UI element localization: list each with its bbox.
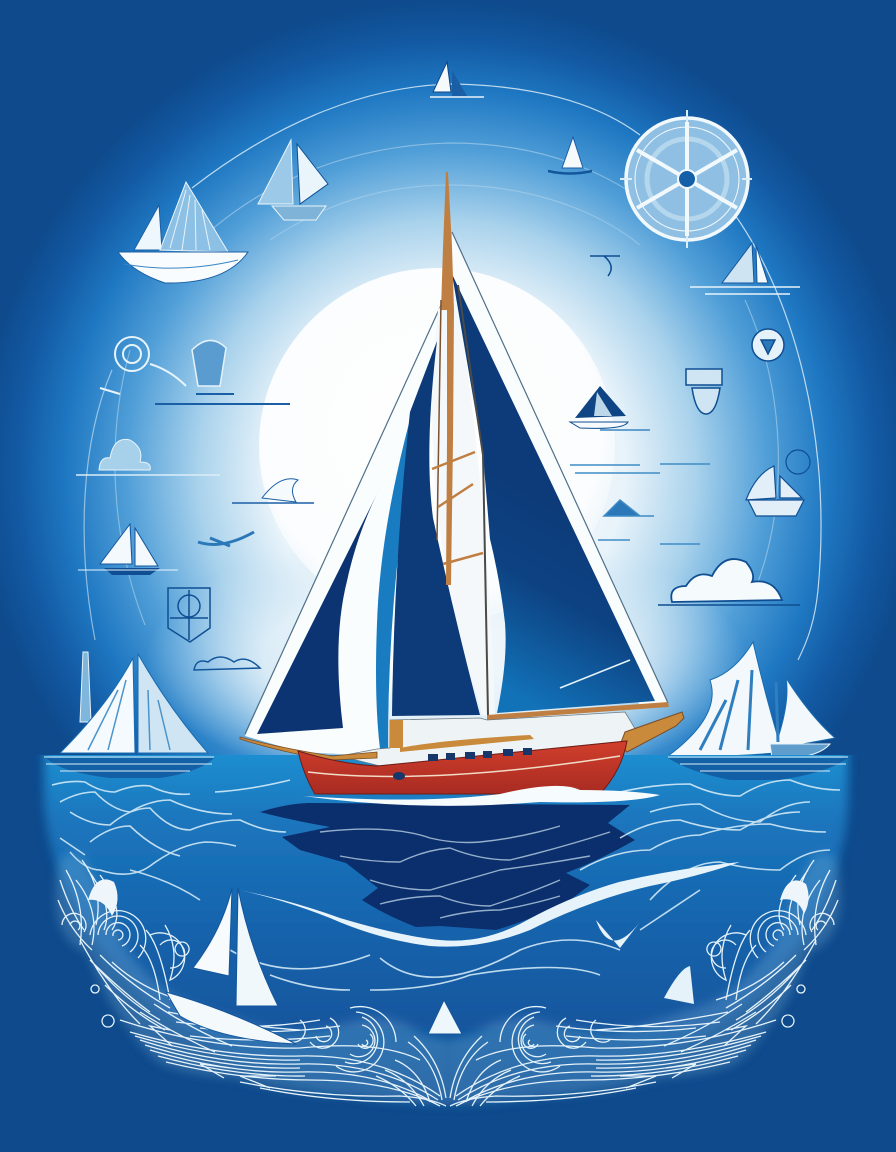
sail highlight bbox=[560, 660, 630, 688]
sea bbox=[38, 755, 854, 1076]
right wave strokes bbox=[570, 464, 710, 544]
small sailboat: left bbox=[78, 524, 178, 575]
small boat: right bbox=[690, 243, 800, 294]
shark fin bbox=[232, 479, 314, 503]
swirl white caps bbox=[88, 879, 809, 916]
horizon lines bbox=[44, 757, 848, 771]
sailboat: horizon left bbox=[60, 654, 208, 753]
sun disc bbox=[259, 268, 615, 624]
small sailboat: mid right bbox=[570, 386, 650, 430]
lantern boat: left bbox=[155, 340, 290, 404]
reflection ripples bbox=[320, 826, 610, 918]
bow foam bbox=[303, 786, 660, 806]
ornamental swirls: left bbox=[55, 853, 448, 1106]
small boat: top right bbox=[548, 137, 592, 174]
sailboat sketch: right bbox=[746, 450, 810, 516]
ring icon: left bbox=[100, 337, 186, 394]
wave lines bbox=[52, 780, 840, 990]
sailboat: upper left large bbox=[118, 182, 248, 283]
outer white sail: right bbox=[452, 232, 668, 706]
navy sail: centre bbox=[392, 341, 480, 716]
swimmer mark bbox=[198, 532, 254, 546]
boom bbox=[487, 702, 669, 720]
orbit rings bbox=[84, 84, 821, 660]
horizon boat reflections bbox=[46, 758, 848, 780]
spreaders bbox=[432, 452, 483, 564]
bright wave crest bbox=[239, 862, 740, 947]
cloud: right bbox=[658, 559, 800, 605]
navy sail panel: left bbox=[257, 484, 382, 734]
hull bbox=[298, 741, 627, 794]
blue sail panel: centre left bbox=[376, 412, 412, 749]
sailboat: bottom left bbox=[166, 888, 296, 1044]
outer white jib: left bbox=[245, 303, 442, 756]
cabin bbox=[340, 712, 640, 766]
hull stripe bbox=[308, 756, 620, 776]
navy sail: right bbox=[452, 274, 655, 713]
small boat: bottom right bbox=[596, 920, 694, 1004]
mast bbox=[441, 172, 454, 585]
boat reflection bbox=[260, 803, 635, 930]
portholes bbox=[393, 748, 532, 780]
main sailboat bbox=[240, 172, 684, 794]
small boat: bottom centre bbox=[428, 1000, 462, 1034]
centre white sail bbox=[432, 285, 495, 715]
shield emblem bbox=[168, 588, 210, 642]
compass wheel bbox=[620, 110, 752, 248]
cloud: left bbox=[76, 439, 220, 475]
sailboat: horizon right bbox=[668, 642, 835, 758]
small cloud: lower left bbox=[194, 657, 260, 670]
sailboat: upper left medium bbox=[258, 140, 328, 220]
small boat: top centre bbox=[430, 62, 484, 97]
lighthouse bbox=[80, 652, 91, 722]
deck rail and bow bbox=[240, 737, 377, 760]
ornamental swirls: right bbox=[448, 853, 841, 1106]
cabin wood bbox=[390, 720, 534, 752]
small icons: upper right bbox=[590, 256, 784, 414]
luff line bbox=[458, 285, 488, 715]
